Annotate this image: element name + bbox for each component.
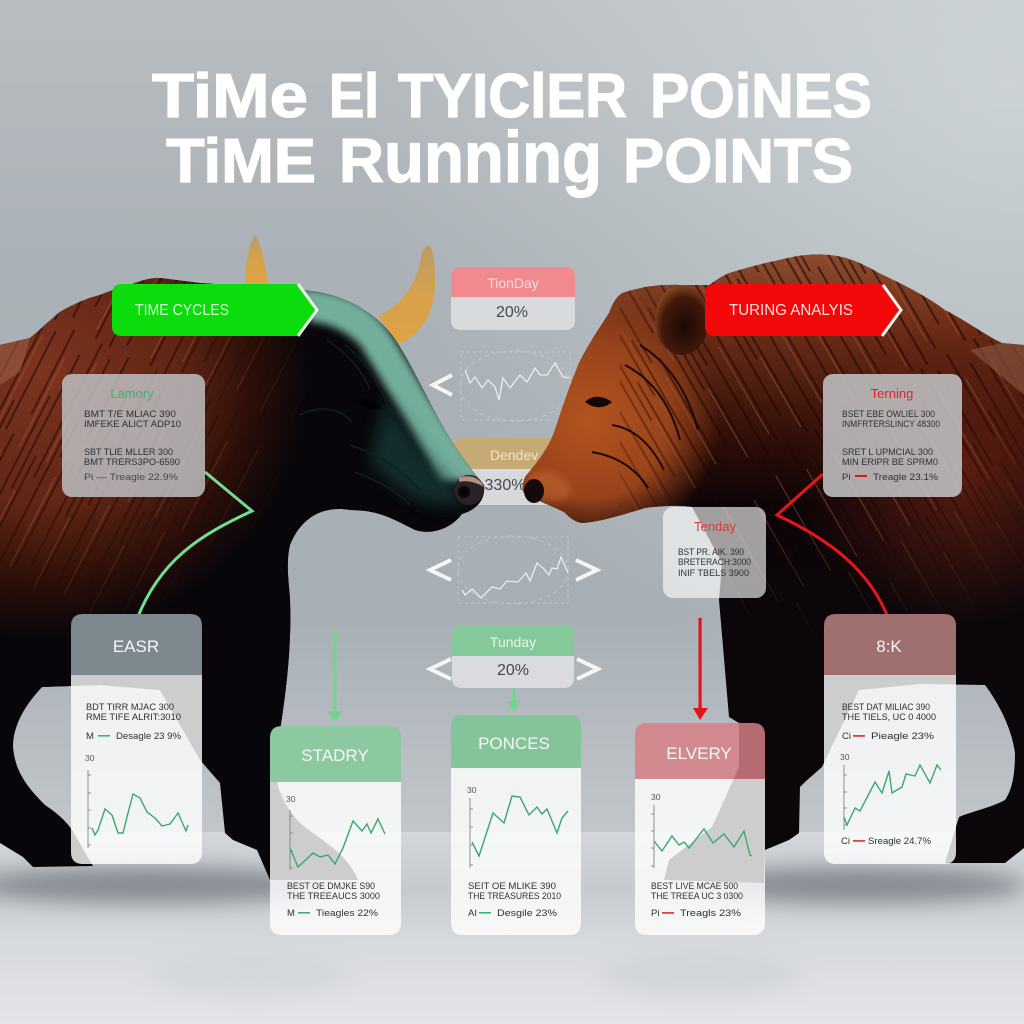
panel: Terning	[823, 374, 962, 497]
banner: TURING ANALYIS	[705, 284, 901, 336]
panel: STADRY: M	[287, 908, 295, 919]
panel: Terning: Pi	[842, 472, 850, 483]
panel: Terning: INMFRTERSLINCY 48300	[842, 419, 940, 430]
panel: PONCES: AI	[468, 908, 477, 919]
title: R	[339, 127, 384, 196]
panel: 8K	[824, 614, 956, 864]
panel: Terning: Treagle 23.1%	[873, 472, 939, 483]
panel: 8K: Ci	[841, 836, 850, 847]
banner: TIME CYCLES	[112, 284, 317, 336]
title: POINTS	[623, 127, 853, 196]
panel: EASR: EASR	[113, 637, 159, 656]
title	[152, 62, 872, 198]
panel: EASR: RME TIFE ALRIT:3010	[86, 712, 181, 723]
panel: EASR: BDT TIRR MJAC 300	[86, 702, 174, 713]
bear body	[500, 240, 1024, 900]
panel: ELVERY: ELVERY	[666, 744, 732, 763]
panel: PONCES	[451, 715, 581, 935]
arrow: red to ELVERY	[693, 618, 708, 720]
title: TiMe	[152, 62, 308, 131]
panel: STADRY: Tieagles 22%	[316, 908, 379, 919]
center card: Tunday	[452, 625, 574, 688]
panel: ELVERY: Pi	[651, 908, 659, 919]
panel: 8K: 8:K	[876, 637, 902, 656]
panel: Lamory: BMT T/E MLIAC 390	[84, 409, 176, 420]
panel: EASR	[71, 614, 202, 864]
center card: Dendev: Dendev	[490, 447, 538, 463]
line chart: STADRY	[286, 794, 385, 870]
line chart: EASR: 30	[85, 753, 95, 763]
title: TYIClER	[398, 62, 627, 131]
bull horn: right	[378, 245, 435, 344]
panel: Terning: MIN ERIPR BE SPRM0	[842, 457, 938, 468]
panel: 8K: Ci	[842, 731, 851, 742]
panel: Lamory: SBT TLIE MLLER 300	[84, 447, 173, 458]
banner: TURING ANALYIS: TURING ANALYIS	[729, 302, 853, 319]
arrow: green to PONCES	[507, 688, 521, 712]
panel: Terning: BSET EBE OWLIEL 300	[842, 409, 935, 420]
center card: Dendev	[453, 438, 575, 505]
bull horn: left	[245, 235, 268, 285]
red connector line	[777, 474, 889, 620]
arrow: green to STADRY	[327, 629, 343, 722]
bull nose	[454, 475, 484, 505]
wave chart: upper center	[460, 351, 570, 421]
panel: Tenday: BRETERACH:3000	[678, 557, 751, 568]
panel: EASR: Desagle 23 9%	[116, 731, 182, 742]
panel: Tenday: BST PR. AIK. 390	[678, 547, 744, 558]
panel: PONCES: SEIT OE MLIKE 390	[468, 881, 556, 892]
panel: 8K: THE TIELS, UC 0 4000	[842, 712, 936, 723]
panel: 8K: BEST DAT MILIAC 390	[842, 702, 930, 713]
panel: Tenday	[663, 507, 766, 598]
panel: ELVERY: Treagls 23%	[680, 908, 742, 919]
title: TiME	[166, 127, 316, 196]
panel: Tenday: Tenday	[694, 519, 736, 534]
bear ear	[655, 285, 709, 355]
bear	[500, 240, 1024, 900]
panel: 8K: Sreagle 24.7%	[868, 836, 932, 847]
panel: STADRY: THE TREEAUCS 3000	[287, 891, 380, 902]
panel: Terning: SRET L UPMCIAL 300	[842, 447, 933, 458]
line chart: 8K	[840, 752, 941, 830]
line chart: ELVERY	[651, 792, 752, 868]
panel: ELVERY: BEST LIVE MCAE 500	[651, 881, 738, 892]
panel: 8K: Pieagle 23%	[871, 731, 935, 742]
chevrons	[430, 375, 598, 679]
line chart: 8K: 30	[840, 752, 850, 762]
title: El	[329, 62, 379, 131]
bear nose	[524, 479, 544, 503]
panel: STADRY: BEST OE DMJKE S90	[287, 881, 375, 892]
line chart: EASR	[85, 753, 188, 848]
green connector line	[137, 472, 252, 619]
banner: TIME CYCLES: TIME CYCLES	[135, 302, 229, 319]
panel: Lamory: BMT TRERS3PO-6590	[84, 457, 180, 468]
panel: Tenday: INIF TBELS 3900	[678, 568, 749, 579]
panel: EASR: M	[86, 731, 94, 742]
panel: PONCES: Desgile 23%	[497, 908, 558, 919]
wave chart: lower center	[458, 536, 568, 604]
center card: Dendev: 330%	[485, 477, 525, 494]
panel: Lamory: IMFEKE ALICT ADP10	[84, 419, 181, 430]
panel: PONCES: PONCES	[478, 734, 550, 753]
panel: ELVERY	[635, 723, 765, 935]
center card: Tunday: 20%	[497, 662, 529, 679]
panel: ELVERY: THE TREEA UC 3 0300	[651, 891, 743, 902]
panel: Lamory: Lamory	[110, 386, 154, 401]
panel: Terning: Terning	[871, 386, 913, 401]
bull	[0, 230, 500, 890]
bull body	[0, 278, 484, 880]
line chart: STADRY: 30	[286, 794, 296, 804]
center card: Tunday: Tunday	[490, 634, 536, 650]
panel: STADRY	[270, 726, 401, 935]
panel: PONCES: THE TREASURES 2010	[468, 891, 561, 902]
line chart: ELVERY: 30	[651, 792, 661, 802]
title: POiNES	[650, 62, 872, 131]
center card: TionDay: TionDay	[487, 275, 539, 291]
line chart: PONCES: 30	[467, 785, 477, 795]
center card: TionDay: 20%	[496, 304, 528, 321]
center card: TionDay	[451, 267, 575, 330]
panel: Lamory	[62, 374, 205, 497]
panel: Lamory: Pi — Treagle 22.9%	[84, 472, 179, 483]
title: unning	[384, 118, 602, 198]
line chart: PONCES	[467, 785, 568, 868]
panel: STADRY: STADRY	[301, 746, 369, 765]
